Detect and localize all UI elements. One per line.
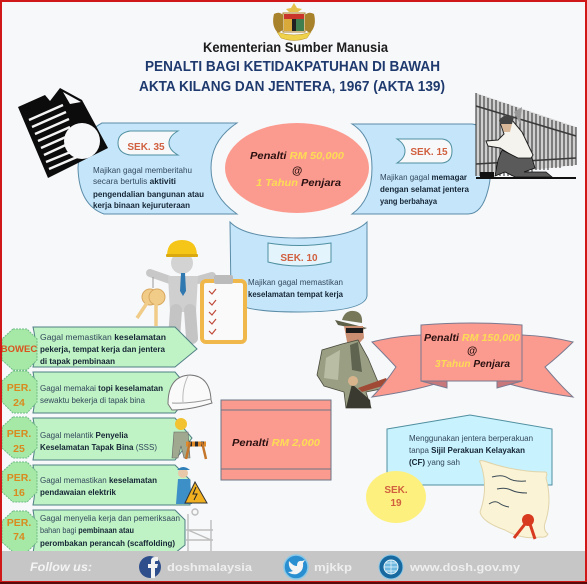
heading: title line 1: PENALTI BAGI KETIDAKPATUHAN DI BAWAH (145, 59, 440, 75)
BOWEC text: pekerja, tempat kerja dan jentera (40, 344, 165, 354)
icon: site supervisor with barrier (172, 418, 206, 459)
PER 24 badge: PER. (7, 382, 31, 394)
PER 25 badge (2, 417, 37, 458)
PER 25 arrow (33, 418, 192, 460)
PER 74 badge: 74 (13, 531, 25, 543)
panel: ribbon penalty RM 150,000: @ (467, 345, 477, 357)
icon: twitter (284, 555, 308, 579)
PER 74 text: perombakan perancah (scaffolding) (40, 538, 175, 548)
PER 24 text (40, 383, 163, 405)
PER 16 text (40, 475, 157, 497)
panel: centre penalty RM 50,000: 1 Tahun Penjara (256, 177, 341, 189)
doshmalaysia: doshmalaysia (167, 562, 253, 574)
PER 74 text (40, 513, 180, 548)
PER 24 arrow (33, 372, 192, 413)
panel: SEK 15 (352, 124, 490, 214)
PER 25 badge: PER. (7, 428, 31, 440)
PER 74 text: bahan bagi pembinaan atau (40, 525, 134, 535)
PER 74 arrow (33, 510, 185, 553)
SEK 10 text: keselamatan tempat kerja (248, 289, 343, 299)
PER 74 text: Gagal menyelia kerja dan pemeriksaan (40, 513, 180, 523)
SEK 19 text (409, 433, 533, 467)
BOWEC text: Gagal memastikan keselamatan (40, 332, 166, 342)
SEK 19 text: tanpa Sijil Perakuan Kelayakan (409, 445, 525, 455)
PER 25 text: Keselamatan Tapak Bina (SSS) (40, 442, 157, 452)
icon: white hard hat (168, 375, 212, 410)
SEK 35 tag: SEK. 35 (127, 142, 165, 153)
SEK 15 tag: SEK. 15 (410, 147, 448, 158)
icon: facebook (139, 556, 161, 578)
panel: ribbon penalty RM 150,000 (372, 323, 573, 397)
footer bar (2, 551, 585, 581)
icon: document (18, 88, 108, 178)
SEK 35 text (93, 165, 204, 210)
icon: electrician with warning sign (176, 467, 207, 504)
BOWEC text (40, 332, 166, 366)
PER 24 text: Gagal memakai topi keselamatan (40, 383, 163, 393)
SEK 10 tag: SEK. 10 (280, 253, 318, 264)
icon: certificate scroll (480, 461, 549, 539)
heading: title line 2: AKTA KILANG DAN JENTERA, 1967 (AKTA 139) (139, 79, 445, 95)
panel: penalty RM 2,000: Penalti RM 2,000 (232, 437, 320, 449)
panel: SEK 10 (230, 222, 367, 312)
website: www.dosh.gov.my (409, 562, 521, 574)
SEK 19 badge: SEK. (384, 485, 408, 496)
SEK 35 text: secara bertulis aktiviti (93, 176, 176, 186)
SEK 19 text: (CF) yang sah (409, 457, 460, 467)
SEK 35 tag (118, 131, 178, 155)
mjkkp: mjkkp (314, 562, 352, 574)
keys (137, 277, 165, 326)
PER 16 badge (2, 462, 37, 502)
PER 16 text: pendawaian elektrik (40, 487, 116, 497)
PER 24 badge (2, 371, 37, 413)
panel: SEK 35 (78, 123, 237, 214)
panel: penalty RM 2,000 (221, 400, 331, 480)
SEK 19 text: Menggunakan jentera berperakuan (409, 433, 533, 443)
panel: centre penalty RM 50,000: @ (292, 165, 302, 177)
list item: PER 16 (2, 462, 190, 505)
PER 16 text: Gagal memastikan keselamatan (40, 475, 157, 485)
illustration: inspector with clipboard (317, 311, 389, 408)
list item: PER 74 (2, 510, 185, 553)
PER 16 badge: PER. (7, 472, 31, 484)
BOWEC badge (1, 329, 37, 370)
PER 24 text: sewaktu bekerja di tapak bina (40, 395, 145, 405)
list item: PER 24 (2, 371, 192, 413)
SEK 15 text: dengan selamat jentera (380, 184, 469, 194)
panel: ribbon penalty RM 150,000: 3Tahun Penjara (435, 358, 510, 370)
SEK 19 badge (366, 471, 426, 523)
PER 74 badge (2, 511, 37, 552)
PER 16 badge: 16 (13, 487, 25, 499)
BOWEC badge: BOWEC (1, 344, 37, 355)
PER 16 arrow (33, 465, 190, 505)
list item: PER 25 (2, 417, 192, 460)
list item: BOWEC (1, 327, 197, 370)
SEK 19 badge: 19 (390, 498, 402, 509)
clipboard (202, 275, 245, 342)
SEK 35 text: Majikan gagal memberitahu (93, 165, 192, 175)
follow us: Follow us: (30, 562, 92, 574)
panel: SEK 19 (366, 415, 552, 523)
panel: centre penalty RM 50,000 (225, 123, 369, 213)
PER 25 text (40, 430, 157, 452)
PER 74 badge: PER. (7, 517, 31, 529)
illustration: worker at fence (476, 93, 576, 178)
heading: ministry: Kementerian Sumber Manusia (203, 40, 388, 55)
icon: scaffolding (186, 509, 213, 552)
icon: globe (379, 555, 403, 579)
SEK 10 text: Majikan gagal memastikan (248, 277, 343, 287)
SEK 35 text: pengendalian bangunan atau (93, 189, 204, 199)
icon: Malaysian coat of arms (273, 3, 315, 40)
PER 24 badge: 24 (13, 397, 25, 409)
panel: ribbon penalty RM 150,000: Penalti RM 150,000 (424, 332, 520, 344)
SEK 10 text (248, 277, 343, 299)
SEK 15 text: yang berbahaya (380, 196, 437, 206)
BOWEC text: di tapak pembinaan (40, 356, 115, 366)
SEK 35 text: kerja binaan kejuruteraan (93, 200, 190, 210)
SEK 15 text: Majikan gagal memagar (380, 172, 468, 182)
BOWEC arrow (33, 327, 197, 367)
SEK 15 text (380, 172, 469, 206)
illustration: 3D safety officer with keys and clipboard (137, 240, 245, 342)
PER 25 badge: 25 (13, 443, 25, 455)
PER 25 text: Gagal melantik Penyelia (40, 430, 128, 440)
panel: centre penalty RM 50,000: Penalti RM 50,000 (250, 150, 344, 162)
